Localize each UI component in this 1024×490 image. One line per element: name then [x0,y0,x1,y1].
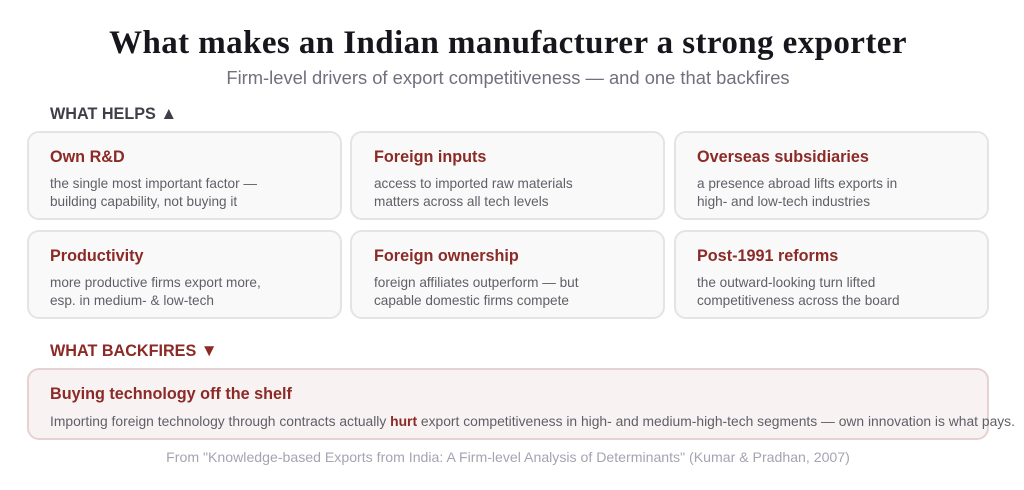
panel: post-1991 reforms: competitiveness across the board [697,293,900,308]
subtitle: Firm-level drivers of export competitiveness — and one that backfires [226,67,790,88]
panel: foreign ownership: capable domestic firms compete [374,293,569,308]
panel: foreign inputs: matters across all tech levels [374,194,549,209]
panel: own R&D [27,131,342,220]
panel: own R&D: building capability, not buying it [50,194,237,209]
panel: productivity: more productive firms export more, [50,275,261,290]
panel: foreign inputs: Foreign inputs [374,148,486,166]
source note: From "Knowledge-based Exports from India: A Firm-level Analysis of Determinants" (Kumar & Pradhan, 2007) [166,449,850,465]
panel: productivity: Productivity [50,247,144,265]
panel: own R&D: Own R&D [50,148,125,166]
panel: post-1991 reforms [674,230,989,319]
panel: overseas subsidiaries: Overseas subsidiaries [697,148,869,166]
heading: what backfires: WHAT BACKFIRES ▼ [50,341,218,360]
panel: foreign ownership: Foreign ownership [374,247,519,265]
panel: overseas subsidiaries: high- and low-tech industries [697,194,870,209]
panel: foreign inputs [350,131,665,220]
panel: own R&D: the single most important factor — [50,176,257,191]
title: What makes an Indian manufacturer a strong exporter [109,25,907,61]
panel: foreign inputs: access to imported raw materials [374,176,573,191]
panel: buying technology: Importing foreign technology through contracts actually hurt export competitiveness in high- and medium-high-tech segments — own innovation is what pays. [50,413,1015,429]
panel: foreign ownership: foreign affiliates outperform — but [374,275,579,290]
panel: buying technology [27,368,989,440]
panel: post-1991 reforms: Post-1991 reforms [697,247,838,265]
heading: what helps: WHAT HELPS ▲ [50,104,177,123]
panel: productivity: esp. in medium- & low-tech [50,293,214,308]
panel: productivity [27,230,342,319]
panel: overseas subsidiaries: a presence abroad lifts exports in [697,176,897,191]
panel: buying technology: Buying technology off the shelf [50,385,292,403]
panel: post-1991 reforms: the outward-looking turn lifted [697,275,875,290]
panel: overseas subsidiaries [674,131,989,220]
panel: foreign ownership [350,230,665,319]
